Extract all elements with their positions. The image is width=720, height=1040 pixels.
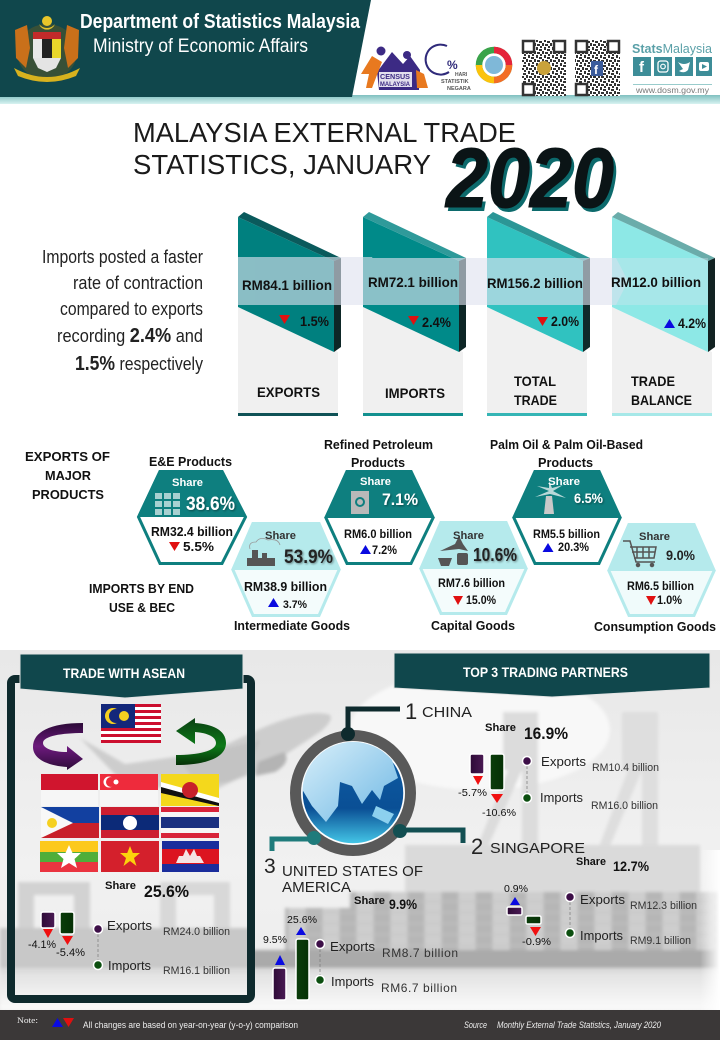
heading: top 3 trading partners	[394, 653, 710, 697]
partner: United States of America: Imports	[331, 974, 374, 989]
panel: capital goods hexagon: RM7.6 billion	[438, 576, 505, 590]
chart: China change bars	[458, 754, 516, 819]
logo: census: CENSUS	[380, 74, 410, 81]
partner: China: Imports	[540, 790, 583, 805]
card values: TRADE	[514, 392, 557, 408]
chart: ASEAN change bars: -5.4%	[56, 947, 85, 959]
card values: 4.2%	[678, 315, 706, 331]
panel: E&E products hexagon: E&E Products	[149, 454, 232, 469]
partner: China: RM10.4 billion	[592, 762, 659, 774]
panel: refined petroleum hexagon: RM6.0 billion	[344, 527, 412, 541]
header logos	[361, 40, 713, 96]
icon: coat of arms	[14, 16, 80, 82]
partner: United States of America: RM6.7 billion	[381, 981, 457, 995]
panel: consumption goods hexagon	[594, 523, 716, 634]
partner: United States of America: UNITED STATES OF	[282, 863, 423, 880]
icon: palm tree	[535, 481, 566, 514]
background photo: airplane and container port	[0, 650, 720, 1010]
panel: palm oil hexagon: Products	[538, 455, 593, 470]
panel: capital goods hexagon: Capital Goods	[431, 618, 515, 633]
card values: RM156.2 billion	[487, 275, 583, 291]
card values: 2.0%	[551, 313, 579, 329]
partner: Singapore: RM9.1 billion	[630, 935, 691, 947]
panel: refined petroleum hexagon	[324, 437, 435, 564]
footer note: All changes are based on year-on-year (y-o-y) comparison	[83, 1020, 298, 1030]
panel: E&E products hexagon: RM32.4 billion	[151, 524, 233, 539]
card values: RM84.1 billion	[242, 277, 332, 293]
panel: intermediate goods hexagon	[231, 522, 350, 633]
panel: consumption goods hexagon: Share	[639, 531, 670, 543]
ASEAN share: 25.6%	[144, 882, 189, 901]
partner: Singapore: RM12.3 billion	[630, 900, 697, 912]
flag: Philippines	[41, 807, 99, 838]
year 2020: 2020	[447, 135, 617, 229]
logo: hari statistik negara	[426, 45, 471, 92]
header banner	[0, 0, 720, 104]
panel: palm oil hexagon	[490, 437, 643, 564]
partner: United States of America	[263, 855, 458, 1000]
chart: Singapore change bars: -0.9%	[522, 937, 551, 948]
panel: consumption goods hexagon: RM6.5 billion	[627, 579, 694, 593]
card values: TRADE	[631, 373, 675, 389]
panel: intermediate goods hexagon: 3.7%	[283, 599, 307, 611]
chart: USA change bars: 9.5%	[263, 935, 287, 946]
card values: RM72.1 billion	[368, 274, 458, 290]
panel: palm oil hexagon: 6.5%	[574, 490, 603, 506]
chart: Singapore change bars	[504, 884, 551, 948]
partner: China: Share	[485, 722, 516, 734]
icon: electronics	[155, 493, 180, 515]
intro text: 1.5% respectively	[75, 353, 203, 375]
logo: hari statistik negara: %	[447, 58, 458, 72]
card values	[242, 274, 706, 408]
partner: Singapore: 12.7%	[613, 858, 649, 874]
panel: imports card	[363, 212, 466, 416]
section labels	[25, 449, 194, 615]
arrow bands across cards	[238, 257, 708, 305]
cranes	[472, 712, 538, 890]
partner: United States of America: AMERICA	[282, 879, 351, 896]
flag: Malaysia	[101, 704, 161, 743]
footer bar	[0, 1010, 720, 1040]
header title: Department of Statistics Malaysia	[80, 11, 361, 33]
panel: trade balance card	[612, 212, 715, 416]
footer source: Monthly External Trade Statistics, January 2020	[497, 1020, 661, 1030]
ASEAN legend and values: RM24.0 billion	[163, 926, 230, 938]
panel: exports card	[238, 212, 341, 416]
panel: E&E products hexagon	[137, 454, 247, 564]
ASEAN legend and values: Imports	[108, 958, 151, 973]
arrow: green curved imports	[176, 718, 226, 765]
title	[133, 117, 617, 229]
flag: Singapore	[100, 774, 158, 806]
panel: E&E products hexagon: 5.5%	[183, 539, 214, 554]
StatsMalaysia social block: f	[639, 59, 645, 76]
panel: refined petroleum hexagon: 7.1%	[382, 490, 418, 509]
partner: Singapore: Share	[576, 856, 606, 868]
intro text: Imports posted a faster	[42, 247, 203, 267]
panel: total trade card	[487, 212, 590, 416]
ASEAN share	[105, 880, 189, 901]
logo: census	[361, 46, 428, 90]
chart: ASEAN change bars: -4.1%	[28, 939, 56, 951]
title: MALAYSIA EXTERNAL TRADE	[133, 117, 516, 148]
partner: China: 1	[405, 699, 417, 724]
section labels: MAJOR	[45, 468, 92, 483]
heading: trade with ASEAN	[20, 654, 243, 698]
footer note: Note:	[17, 1016, 38, 1025]
partner: United States of America: 3	[264, 855, 276, 878]
flag: Myanmar	[40, 841, 98, 872]
icon: factory	[247, 538, 280, 566]
header title: Ministry of Economic Affairs	[93, 36, 308, 57]
card values: BALANCE	[631, 392, 692, 408]
logo: hari statistik negara: NEGARA	[447, 86, 471, 92]
panel: consumption goods hexagon: Consumption Goods	[594, 619, 716, 634]
panel: refined petroleum hexagon: Products	[351, 455, 405, 470]
globe	[296, 727, 410, 850]
logo: sustainable development goals wheel	[479, 50, 509, 80]
partner: Singapore: Exports	[580, 892, 626, 907]
card values: TOTAL	[514, 373, 556, 389]
partner: Singapore	[471, 834, 697, 948]
icon: QR code 1	[522, 40, 566, 96]
ASEAN legend and values	[94, 918, 230, 977]
panel: capital goods hexagon: 15.0%	[466, 593, 496, 607]
StatsMalaysia social block: StatsMalaysia	[632, 41, 713, 56]
intro text: rate of contraction	[73, 273, 203, 293]
icon: oil barrel	[351, 491, 369, 514]
panel: intermediate goods hexagon: 53.9%	[284, 547, 333, 568]
card values: 2.4%	[422, 314, 451, 330]
arrow: purple curved exports	[33, 723, 83, 770]
connector lines	[272, 709, 463, 851]
section labels: IMPORTS BY END	[89, 581, 194, 596]
footer source: Source	[464, 1020, 487, 1030]
heading: top 3 trading partners: TOP 3 TRADING PARTNERS	[463, 664, 628, 680]
partner: China: Exports	[541, 754, 587, 769]
title: STATISTICS, JANUARY	[133, 149, 431, 180]
chart: Singapore change bars: 0.9%	[504, 884, 528, 895]
panel: palm oil hexagon: Palm Oil & Palm Oil-Based	[490, 437, 643, 452]
partner: United States of America: Exports	[330, 939, 376, 954]
panel: consumption goods hexagon: 1.0%	[657, 593, 682, 607]
panel: refined petroleum hexagon: Refined Petroleum	[324, 437, 433, 452]
panel: palm oil hexagon: Share	[548, 476, 580, 488]
panel: intermediate goods hexagon: Intermediate Goods	[234, 618, 350, 633]
panel: E&E products hexagon: 38.6%	[186, 494, 235, 515]
panel: refined petroleum hexagon: Share	[360, 476, 391, 488]
logo: hari statistik negara: HARI	[455, 72, 468, 78]
logo: census: MALAYSIA	[380, 82, 411, 88]
card values: 1.5%	[300, 313, 329, 329]
airplane	[80, 713, 331, 790]
partner: China: 16.9%	[524, 724, 568, 743]
chart: USA change bars: 25.6%	[287, 915, 317, 926]
partner: Singapore: Imports	[580, 928, 623, 943]
panel: refined petroleum hexagon: 7.2%	[372, 543, 397, 557]
panel: palm oil hexagon: RM5.5 billion	[533, 527, 600, 541]
panel: capital goods hexagon	[419, 521, 528, 633]
flag: Indonesia	[41, 774, 98, 806]
partner: United States of America: Share	[354, 895, 385, 907]
partner: United States of America: 9.9%	[389, 896, 417, 912]
intro text	[42, 247, 203, 375]
panel: capital goods hexagon: Share	[453, 530, 484, 542]
icon: plane, ship and truck	[438, 536, 468, 566]
ASEAN share: Share	[105, 880, 136, 892]
intro text: recording 2.4% and	[57, 325, 203, 347]
section labels: EXPORTS OF	[25, 449, 110, 464]
panel: trade with ASEAN	[11, 654, 251, 999]
footer note	[17, 1016, 298, 1030]
flag: Thailand	[161, 807, 219, 838]
logo: hari statistik negara: STATISTIK	[441, 79, 469, 85]
partner: China: CHINA	[422, 704, 472, 721]
panel: E&E products hexagon: Share	[172, 477, 203, 489]
StatsMalaysia social block	[632, 41, 713, 95]
card values: IMPORTS	[385, 385, 445, 401]
panel: consumption goods hexagon: 9.0%	[666, 547, 695, 563]
flag: Laos	[101, 807, 159, 838]
partner: United States of America: RM8.7 billion	[382, 946, 458, 960]
chart: ASEAN change bars	[28, 912, 85, 959]
icon: QR code 2: f	[594, 63, 599, 77]
partner: Singapore: SINGAPORE	[490, 840, 585, 857]
panel: palm oil hexagon: 20.3%	[558, 540, 589, 554]
chart: USA change bars	[263, 915, 317, 1000]
panel: intermediate goods hexagon: Share	[265, 530, 296, 542]
panel: intermediate goods hexagon: RM38.9 billion	[244, 579, 327, 594]
panel: capital goods hexagon: 10.6%	[473, 545, 517, 565]
partner: China: RM16.0 billion	[591, 800, 658, 812]
StatsMalaysia social block: www.dosm.gov.my	[635, 86, 709, 95]
ASEAN legend and values: RM16.1 billion	[163, 965, 230, 977]
section labels: PRODUCTS	[32, 487, 104, 502]
chart: China change bars: -5.7%	[458, 788, 487, 799]
icon: shopping cart	[623, 541, 656, 566]
partner: China	[405, 699, 659, 819]
heading: trade with ASEAN: TRADE WITH ASEAN	[63, 665, 185, 681]
containers	[0, 928, 250, 974]
flag: Vietnam	[101, 841, 159, 872]
ASEAN legend and values: Exports	[107, 918, 153, 933]
flag: Brunei	[161, 774, 219, 806]
partner: Singapore: 2	[471, 834, 483, 859]
header title	[80, 11, 361, 57]
chart: China change bars: -10.6%	[482, 808, 516, 819]
icon: QR code 2	[575, 40, 620, 96]
year 2020: 2020	[444, 131, 614, 225]
card values: EXPORTS	[257, 384, 320, 400]
section labels: USE & BEC	[109, 600, 176, 615]
flag: Cambodia	[162, 841, 219, 872]
intro text: compared to exports	[60, 299, 203, 319]
card values: RM12.0 billion	[611, 274, 701, 290]
